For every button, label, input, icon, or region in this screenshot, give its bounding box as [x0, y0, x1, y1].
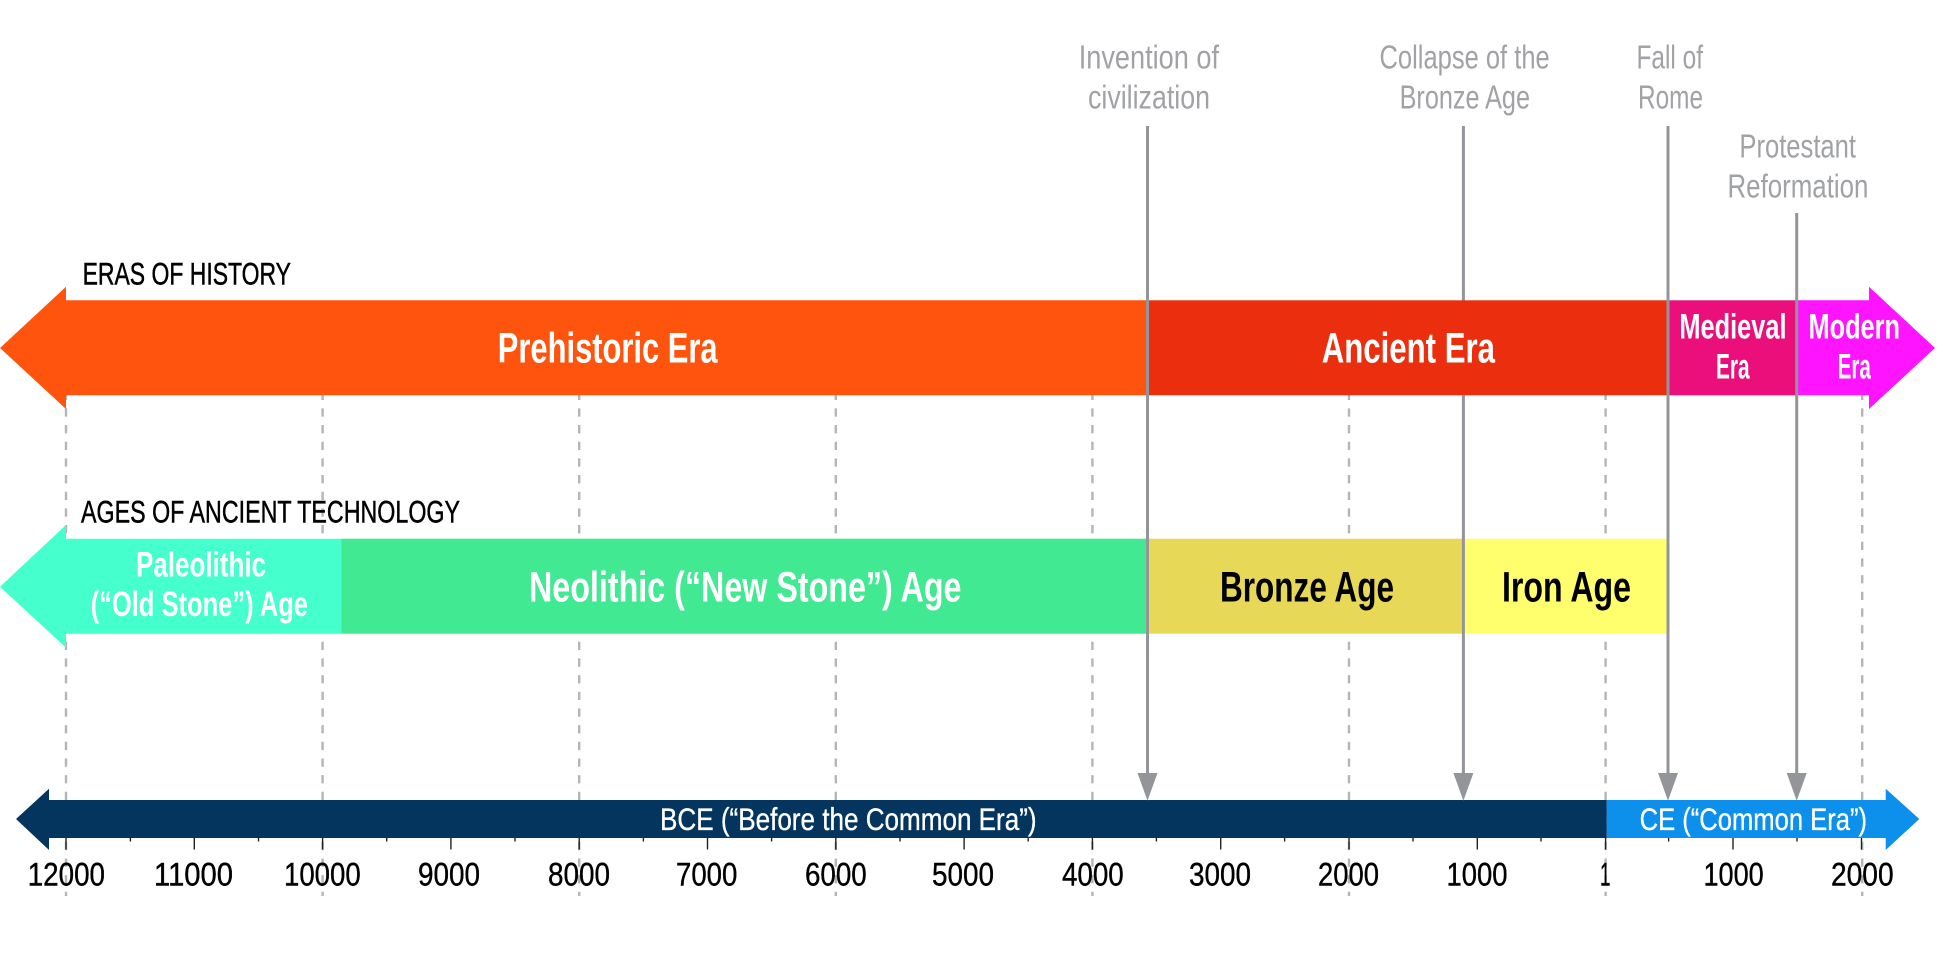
axis year labels — [28, 856, 1894, 892]
axis year labels: 3000 — [1189, 856, 1251, 892]
modern era arrow: Era — [1838, 348, 1871, 387]
arrow: protestant reformation — [1787, 213, 1807, 801]
medieval era block: Era — [1716, 348, 1750, 387]
event: protestant reformation: Protestant — [1739, 128, 1857, 165]
axis year labels: 11000 — [154, 856, 233, 892]
prehistoric era arrow: Prehistoric Era — [498, 325, 718, 373]
arrow: collapse of the bronze age — [1453, 395, 1473, 801]
neolithic age block — [342, 539, 1148, 634]
axis year labels: 1000 — [1704, 856, 1764, 892]
medieval era block — [1668, 300, 1796, 395]
BCE arrow: BCE (“Before the Common Era”) — [660, 801, 1037, 837]
prehistoric era arrow — [0, 287, 1148, 409]
event: collapse of the bronze age: Collapse of the — [1380, 39, 1550, 76]
iron age block: Iron Age — [1502, 564, 1631, 612]
axis tick marks — [66, 838, 1862, 850]
event: fall of rome — [1636, 39, 1703, 801]
paleolithic age arrow: Paleolithic — [136, 546, 266, 585]
event: protestant reformation: Reformation — [1728, 169, 1868, 206]
ancient era block: Ancient Era — [1322, 325, 1496, 373]
axis year labels: 2000 — [1318, 856, 1379, 892]
axis year labels: 9000 — [418, 856, 480, 892]
arrow line: collapse of the bronze age (behind eras band) — [1462, 126, 1465, 306]
axis year labels: 1000 — [1446, 856, 1508, 892]
axis year labels: 1 — [1600, 856, 1610, 892]
axis year labels: 7000 — [676, 856, 737, 892]
bronze age block — [1148, 539, 1464, 634]
paleolithic age arrow — [0, 525, 342, 648]
axis year labels: 5000 — [932, 856, 994, 892]
axis year labels: 12000 — [28, 856, 105, 892]
event: invention of civilization — [1079, 39, 1220, 801]
modern era arrow — [1796, 287, 1935, 409]
axis year labels: 8000 — [548, 856, 610, 892]
paleolithic age arrow: (“Old Stone”) Age — [91, 585, 308, 624]
panel: eras of history band — [0, 287, 1935, 409]
CE arrow: CE (“Common Era”) — [1640, 801, 1867, 837]
heading: ages of ancient technology: AGES OF ANCIENT TECHNOLOGY — [81, 494, 460, 530]
axis year labels: 10000 — [284, 856, 361, 892]
heading: eras of history: ERAS OF HISTORY — [83, 255, 291, 291]
panel: ages of ancient technology band — [0, 525, 1667, 648]
arrow: fall of rome — [1658, 126, 1678, 801]
modern era arrow: Modern — [1808, 308, 1900, 347]
axis year labels: 4000 — [1062, 856, 1124, 892]
axis year labels: 2000 — [1831, 856, 1894, 892]
arrow: invention of civilization — [1138, 126, 1158, 801]
event: fall of rome: Fall of — [1636, 39, 1703, 76]
panel: BCE / CE timeline axis — [16, 789, 1919, 892]
neolithic age block: Neolithic (“New Stone”) Age — [529, 564, 962, 612]
iron age block — [1464, 539, 1667, 634]
event: collapse of the bronze age: Bronze Age — [1400, 79, 1530, 116]
axis year labels: 6000 — [805, 856, 867, 892]
event: invention of civilization: civilization — [1088, 79, 1210, 116]
ancient era block — [1148, 300, 1668, 395]
medieval era block: Medieval — [1679, 308, 1786, 347]
event: invention of civilization: Invention of — [1079, 39, 1220, 76]
event: protestant reformation — [1728, 128, 1868, 801]
BCE arrow — [16, 789, 1607, 850]
CE arrow — [1607, 789, 1919, 850]
bronze age block: Bronze Age — [1220, 564, 1394, 612]
event: fall of rome: Rome — [1638, 79, 1703, 116]
event: collapse of the bronze age — [1380, 39, 1550, 801]
